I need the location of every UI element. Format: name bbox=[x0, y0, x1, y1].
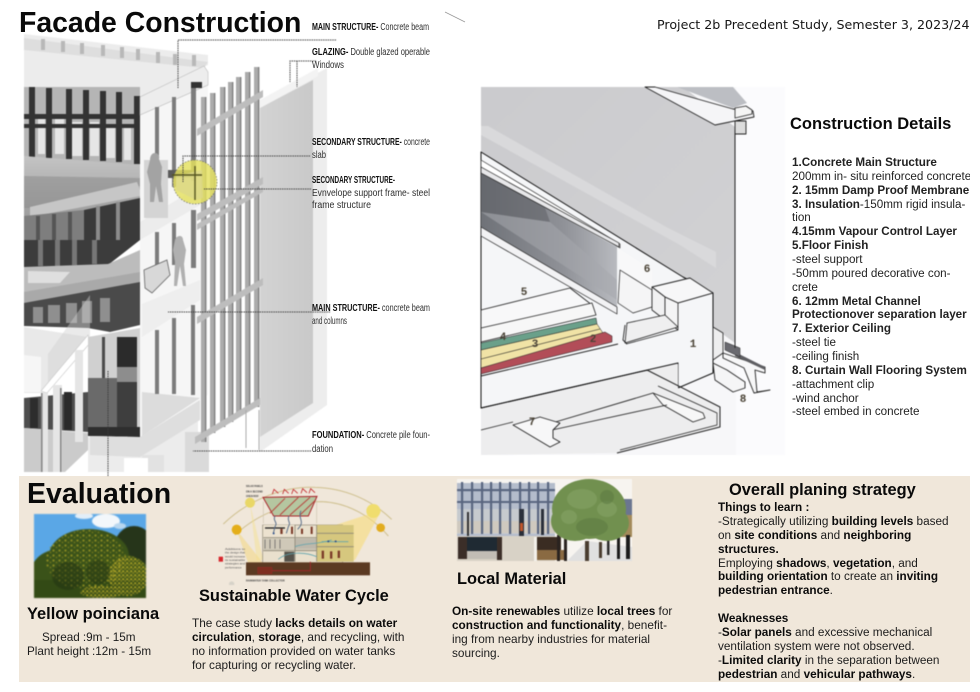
second floor glazing bbox=[24, 156, 140, 240]
sun paths bbox=[223, 487, 392, 536]
label: secondary structure envelope: Evnvelope support frame- steel bbox=[312, 188, 430, 199]
construction details list: -steel support bbox=[792, 253, 863, 266]
detail reference numbers: 1 bbox=[690, 339, 697, 351]
overall strategy text: Weaknesses bbox=[718, 612, 788, 625]
balustrade glass bbox=[481, 172, 617, 307]
mid level bbox=[24, 240, 140, 268]
detail reference numbers: 3 bbox=[532, 339, 539, 351]
pale back panel bbox=[260, 68, 327, 452]
water cycle text bbox=[192, 616, 404, 672]
water cycle text: circulation, storage, and recycling, with bbox=[192, 630, 404, 644]
construction details list: 3. Insulation-150mm rigid insula- bbox=[792, 198, 965, 211]
overall strategy text bbox=[718, 501, 949, 680]
annotations bbox=[246, 484, 285, 583]
label: secondary structure slab: slab bbox=[312, 150, 326, 161]
label: secondary structure slab: SECONDARY STRUCTURE- concrete bbox=[312, 137, 430, 148]
figure, bench and standing person bbox=[144, 160, 168, 218]
photo: local material building and tree bbox=[456, 478, 633, 562]
label: glazing: Windows bbox=[312, 60, 344, 71]
floor build up layers bbox=[481, 288, 592, 334]
label: main structure columns bbox=[312, 303, 430, 327]
local material text: construction and functionality, benefit- bbox=[452, 618, 667, 632]
diagram: sustainable water cycle bbox=[218, 484, 392, 586]
panel: evaluation background bbox=[19, 476, 970, 682]
label: secondary structure slab bbox=[312, 137, 430, 161]
detail reference numbers bbox=[500, 264, 747, 429]
right wall of building bbox=[140, 75, 208, 437]
construction details list bbox=[792, 156, 970, 418]
construction details list: 8. Curtain Wall Flooring System bbox=[792, 364, 967, 377]
overall strategy text: pedestrian and vehicular pathways. bbox=[718, 668, 915, 680]
construction details list: 4.15mm Vapour Control Layer bbox=[792, 225, 957, 238]
upstand and tiers bbox=[618, 248, 652, 290]
upper glass facade bbox=[24, 87, 140, 167]
label: main structure beam: MAIN STRUCTURE- Concrete beam bbox=[312, 22, 429, 33]
label: main structure columns: and columns bbox=[312, 316, 347, 327]
annotations: RAINWATER TANK COLLECTOR bbox=[246, 579, 285, 583]
annotations: SOLAR PANELS bbox=[246, 484, 263, 488]
overall strategy text: structures. bbox=[718, 543, 779, 556]
project caption: Project 2b Precedent Study, Semester 3, 2023/24 bbox=[657, 17, 970, 32]
construction details list: Protectionover separation layer bbox=[792, 308, 967, 321]
construction details list: -steel embed in concrete bbox=[792, 405, 919, 418]
construction details list: tion bbox=[792, 211, 811, 224]
label: foundation: dation bbox=[312, 444, 333, 455]
label: secondary structure envelope: SECONDARY STRUCTURE- bbox=[312, 175, 395, 186]
detail reference numbers: 7 bbox=[529, 417, 535, 429]
local material text: On-site renewables utilize local trees for bbox=[452, 604, 672, 618]
yellow highlight circle bbox=[173, 160, 217, 204]
leader lines bbox=[108, 40, 336, 476]
detail reference numbers: 2 bbox=[590, 334, 596, 346]
construction details list: -steel tie bbox=[792, 336, 836, 349]
diagram: sustainable water cycle: Additions to bbox=[225, 548, 246, 551]
local material text: ing from nearby industries for material bbox=[452, 632, 650, 646]
ground and cistern bbox=[246, 562, 370, 575]
heading: yellow poinciana: Yellow poinciana bbox=[27, 605, 159, 623]
construction details list: -wind anchor bbox=[792, 392, 859, 405]
photo: yellow poinciana tree bbox=[33, 513, 147, 599]
green roof bbox=[263, 496, 317, 516]
label: foundation: FOUNDATION- Concrete pile foun- bbox=[312, 430, 430, 441]
diagram: sustainable water cycle: the design that bbox=[225, 552, 245, 555]
construction details list: -50mm poured decorative con- bbox=[792, 267, 951, 280]
glass wall bbox=[481, 87, 735, 343]
heading: sustainable water cycle: Sustainable Water Cycle bbox=[199, 587, 389, 605]
construction details list: -attachment clip bbox=[792, 378, 874, 391]
water pipes bbox=[273, 511, 301, 533]
overall strategy text: pedestrian entrance. bbox=[718, 584, 833, 597]
water cycle text: for capturing or recycling water. bbox=[192, 658, 356, 672]
label: glazing bbox=[312, 47, 430, 71]
construction details list: 7. Exterior Ceiling bbox=[792, 322, 891, 335]
white lower slab and rail bbox=[24, 327, 88, 393]
local material text bbox=[452, 604, 672, 660]
overall strategy text: Things to learn : bbox=[718, 501, 809, 514]
ceiling bbox=[481, 364, 720, 455]
label: glazing: GLAZING- Double glazed operable bbox=[312, 47, 430, 58]
suns bbox=[245, 498, 255, 508]
label: main structure columns: MAIN STRUCTURE- concrete beam bbox=[312, 303, 430, 314]
overall strategy text: -Strategically utilizing building levels based bbox=[718, 515, 949, 528]
building bbox=[263, 525, 343, 564]
concrete slab body bbox=[481, 152, 713, 408]
plant dimensions bbox=[27, 631, 151, 658]
construction details list: 5.Floor Finish bbox=[792, 239, 868, 252]
detail reference numbers: 8 bbox=[740, 394, 747, 406]
lower interior bbox=[88, 328, 140, 435]
heading: overall planning strategy: Overall planing strategy bbox=[729, 481, 916, 499]
label: secondary structure envelope: frame structure bbox=[312, 200, 371, 211]
detail reference numbers: 5 bbox=[521, 287, 528, 299]
heading: construction details: Construction Details bbox=[790, 115, 951, 133]
diagram: sustainable water cycle: strategies and bbox=[225, 563, 246, 566]
louvre fins bbox=[201, 67, 259, 442]
label: secondary structure envelope bbox=[312, 175, 430, 211]
annotations: ON A SECOND bbox=[246, 489, 263, 493]
annotations: GREEN ROOF bbox=[246, 494, 259, 498]
construction details list: 6. 12mm Metal Channel bbox=[792, 295, 921, 308]
overall strategy text: Employing shadows, vegetation, and bbox=[718, 556, 918, 570]
water cycle text: no information provided on water tanks bbox=[192, 644, 395, 658]
solar panels bbox=[272, 489, 315, 494]
diagram: sustainable water cycle: performance bbox=[225, 566, 242, 569]
plant dimensions: Plant height :12m - 15m bbox=[27, 645, 151, 658]
decorative stray stroke bbox=[444, 12, 466, 22]
diagram: sustainable water cycle: its sustainable bbox=[225, 559, 246, 562]
top mullion bbox=[677, 87, 747, 108]
diagram: sustainable water cycle: would increase bbox=[225, 555, 246, 558]
construction details list: 2. 15mm Damp Proof Membrane bbox=[792, 184, 969, 197]
overall strategy text: -Solar panels and excessive mechanical bbox=[718, 626, 932, 639]
water cycle text: The case study lacks details on water bbox=[192, 616, 397, 630]
overall strategy text: ventilation system were not observed. bbox=[718, 640, 915, 653]
roof bbox=[24, 34, 208, 97]
local material text: sourcing. bbox=[452, 646, 500, 660]
label: foundation bbox=[312, 430, 430, 455]
plant dimensions: Spread :9m - 15m bbox=[42, 631, 136, 644]
title: Facade Construction bbox=[19, 7, 301, 39]
construction details list: -ceiling finish bbox=[792, 350, 859, 363]
construction details list: 1.Concrete Main Structure bbox=[792, 156, 937, 169]
heading: local material: Local Material bbox=[457, 570, 566, 588]
detail reference numbers: 4 bbox=[500, 332, 507, 344]
overall strategy text: building orientation to create an inviting bbox=[718, 570, 938, 583]
heading: evaluation: Evaluation bbox=[27, 478, 171, 510]
construction details list: 200mm in- situ reinforced concrete bbox=[792, 170, 970, 183]
overall strategy text: on site conditions and neighboring bbox=[718, 529, 911, 542]
curtain wall foot bbox=[713, 327, 723, 360]
construction details list: crete bbox=[792, 281, 818, 294]
detail reference numbers: 6 bbox=[644, 264, 650, 276]
overall strategy text: -Limited clarity in the separation between bbox=[718, 654, 939, 667]
